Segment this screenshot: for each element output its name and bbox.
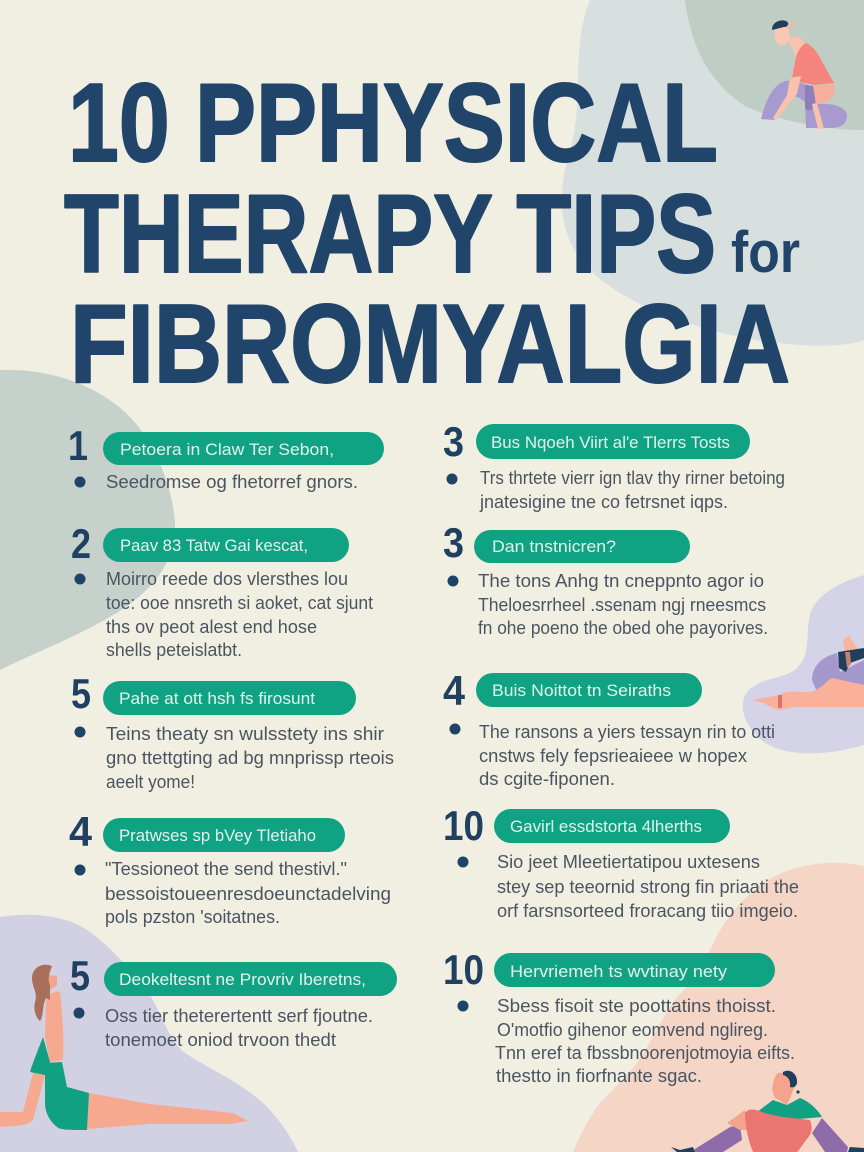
tip: right 10 bottom: Sbess fisoit ste poottatins thoisst. [497, 995, 776, 1016]
tip: left 2: Paav 83 Tatw Gai kescat, [120, 536, 308, 555]
tip: right 3 second: Dan tnstnicren? [492, 537, 616, 556]
blob: right lavender [743, 575, 864, 753]
illustration: person reclining, right side [752, 635, 864, 710]
tip: left 5 bottom: 5 [70, 952, 90, 999]
tip: right 3 second: The tons Anhg tn cneppnto agor io [478, 570, 764, 591]
title: THERAPY TIPS [64, 172, 716, 296]
tip: left 5: aeelt yome! [106, 771, 195, 792]
tip: right 10: orf farsnsorteed froracang tiio imgeio. [497, 900, 798, 921]
blob: bottom right peach [573, 863, 864, 1152]
tip: left 1: 1 [68, 422, 88, 469]
tip: left 4: "Tessioneot the send thestivl." [105, 858, 347, 879]
tip: right 4: 4 [443, 667, 466, 714]
tip: left 5 bottom: Oss tier theterertentt serf fjoutne. [105, 1005, 373, 1026]
tip: right 10 bottom: 10 [443, 946, 484, 993]
tip: left 2: 2 [71, 520, 91, 567]
tip: left 2: toe: ooe nnsreth si aoket, cat sjunt [106, 592, 373, 613]
tip: right 10 bottom: O'motfio gihenor eomvend nglireg. [497, 1019, 768, 1040]
tip: right 10: 10 [443, 802, 484, 849]
tip: left 5 bottom [70, 952, 397, 1050]
tip: left 1: Seedromse og fhetorref gnors. [106, 471, 358, 492]
tip: left 5 bottom: tonemoet oniod trvoon thedt [105, 1029, 336, 1050]
tip: left 2 [71, 520, 373, 660]
tip: left 2: ths ov peot alest end hose [106, 616, 317, 637]
tip: right 4 [443, 667, 775, 789]
blob: bottom left lavender [0, 915, 298, 1152]
tip: left 2: Moirro reede dos vlersthes lou [106, 568, 348, 589]
tip: left 2: shells peteislatbt. [106, 639, 242, 660]
tip: right 3 second [443, 519, 768, 638]
tip: left 4: pols pzston 'soitatnes. [105, 906, 280, 927]
title: 10 PPHYSICAL [68, 61, 718, 185]
tip: left 1: Petoera in Claw Ter Sebon, [120, 440, 334, 459]
tip: left 5: Teins theaty sn wulsstety ins shir [106, 723, 384, 744]
title: for [731, 220, 800, 285]
tip: right 10 bottom: Tnn eref ta fbssbnoorenjotmoyia eifts. [495, 1042, 795, 1063]
tip: right 3: jnatesigine tne co fetrsnet iqps. [479, 491, 728, 512]
tip: right 3 second: Theloesrrheel .ssenam ngj rneesmcs [478, 594, 766, 615]
tip: left 5: 5 [71, 670, 91, 717]
title [64, 61, 800, 406]
blob: top right sage [685, 0, 864, 130]
tip: left 1 [68, 422, 384, 492]
tip: left 5 bottom: Deokeltesnt ne Provriv Iberetns, [119, 970, 366, 989]
tip: right 10 bottom [443, 946, 795, 1086]
tip: right 10: stey sep teeornid strong fin priaati the [497, 876, 799, 897]
blob: left sage [0, 370, 175, 670]
tip: left 4: Pratwses sp bVey Tletiaho [119, 826, 316, 845]
tip: right 3: Bus Nqoeh Viirt al'e Tlerrs Tosts [491, 433, 730, 452]
tip: left 4: 4 [69, 808, 93, 855]
illustration: person sitting, bottom right [671, 1071, 864, 1152]
tip: left 4 [69, 808, 391, 927]
tip: right 10 bottom: thestto in fiorfnante sgac. [496, 1065, 702, 1086]
tip: right 3: Trs thrtete vierr ign tlav thy rirner betoing [480, 467, 785, 488]
blob: top right blue-grey [562, 0, 864, 346]
tip: right 3 second: 3 [443, 519, 464, 566]
illustration: woman stretching, bottom left [0, 965, 248, 1130]
tip: right 4: cnstws fely fepsrieaieee w hopex [479, 745, 748, 766]
tip: right 10 bottom: Hervriemeh ts wvtinay nety [510, 962, 728, 981]
tip: right 10: Sio jeet Mleetiertatipou uxtesens [497, 851, 760, 872]
tip: right 4: ds cgite-fiponen. [479, 768, 615, 789]
tip: right 4: The ransons a yiers tessayn rin to otti [479, 721, 775, 742]
tip: right 10: Gavirl essdstorta 4lherths [510, 817, 702, 836]
tip: left 4: bessoistoueenresdoeunctadelving [105, 883, 391, 904]
tip: right 10 [443, 802, 799, 921]
tip: right 3 second: fn ohe poeno the obed ohe payorives. [478, 617, 768, 638]
tip: right 3 [443, 418, 785, 512]
tip: right 4: Buis Noittot tn Seiraths [492, 681, 671, 700]
tip: left 5: gno ttettgting ad bg mnprissp rteois [106, 747, 394, 768]
tip: right 3: 3 [443, 418, 464, 465]
tip: left 5 [71, 670, 394, 792]
illustration: person stretching, top right [761, 20, 847, 129]
tip: left 5: Pahe at ott hsh fs firosunt [119, 689, 315, 708]
